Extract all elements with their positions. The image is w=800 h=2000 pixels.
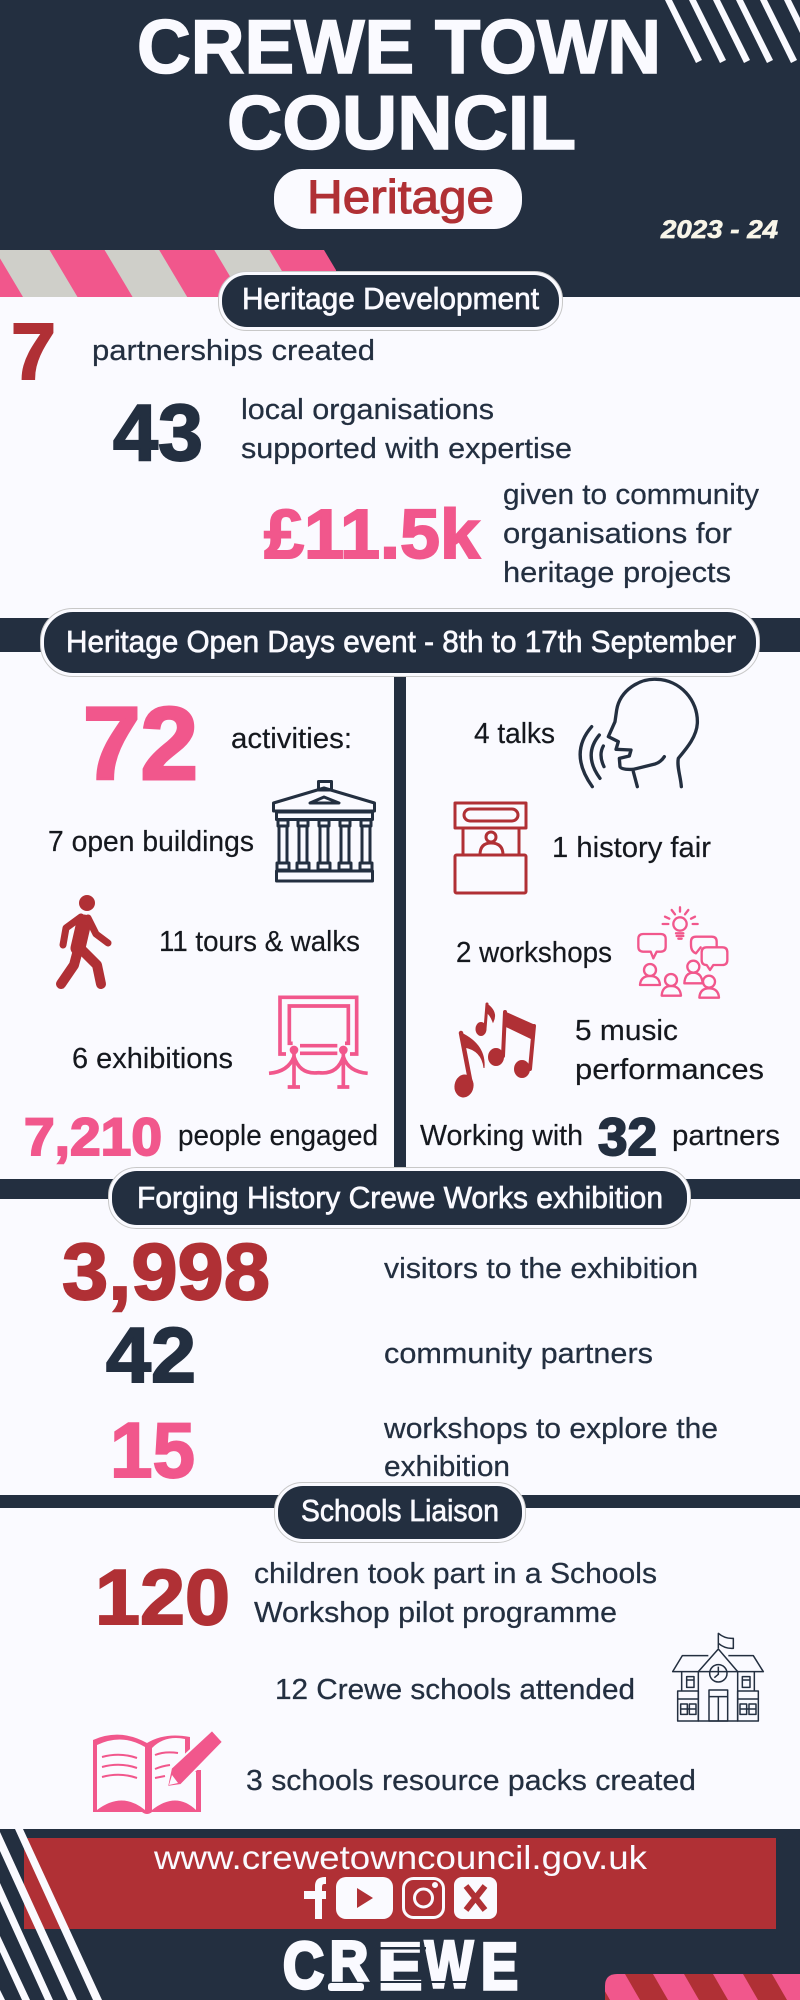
stat: 7 partnerships: 7	[11, 307, 56, 396]
website banner: www.crewetowncouncil.gov.uk	[153, 1839, 648, 1876]
stat: 72 activities: 72	[83, 686, 198, 801]
text: 5 music performances	[575, 1015, 764, 1086]
icon: music notes	[453, 1004, 534, 1098]
title	[137, 5, 661, 166]
icon: youtube	[336, 1877, 393, 1919]
icon: speaking head	[580, 679, 697, 787]
heading pill	[40, 608, 760, 676]
stat: 72 activities: activities:	[231, 723, 352, 755]
stat: 42 community partners: community partners	[384, 1338, 653, 1370]
panel: footer	[0, 1829, 800, 2000]
text: 5 music performances: 5 music	[575, 1015, 678, 1047]
subtitle pill: Heritage	[274, 169, 522, 229]
text: 1 history fair: 1 history fair	[552, 832, 712, 864]
stat: 15 workshops: 15	[110, 1406, 195, 1494]
subtitle pill: Heritage: Heritage	[307, 170, 494, 223]
decorative white stripes	[0, 1829, 102, 2000]
logo: Crewe: C	[283, 1928, 324, 2000]
icon: book and pencil	[93, 1730, 223, 1814]
panel: schools liaison	[0, 1482, 800, 1814]
stat: 15 workshops	[110, 1406, 718, 1494]
stat: 120 children: 120	[95, 1553, 230, 1641]
heading pill	[274, 1482, 526, 1542]
stat: 43 organisations: supported with expertise	[241, 433, 572, 465]
stat: 11.5k funding: organisations for	[503, 518, 733, 550]
stat: 15 workshops: workshops to explore the	[383, 1413, 718, 1445]
stat: 43 organisations: 43	[113, 388, 203, 477]
text: 5 music performances: performances	[575, 1054, 764, 1086]
heading pill: Forging History Crewe Works exhibition	[137, 1180, 663, 1215]
stat: working with 32 partners: 32	[598, 1108, 657, 1167]
icon: temple building	[274, 782, 374, 881]
decorative white stripes	[665, 0, 800, 63]
logo: Crewe	[283, 1927, 518, 2000]
title: CREWE TOWN	[137, 5, 661, 90]
stat: 120 children: children took part in a Schools	[254, 1558, 657, 1590]
stat: 3,998 visitors	[62, 1227, 698, 1316]
panel: heritage open days	[0, 608, 800, 1168]
stat: working with 32 partners: partners	[672, 1120, 780, 1152]
logo: Crewe: W	[425, 1927, 474, 2000]
text: 4 talks: 4 talks	[474, 718, 555, 750]
stat: 42 community partners	[106, 1311, 653, 1399]
striped band	[0, 250, 352, 297]
icon: market stall	[455, 803, 526, 893]
stat: 3,998 visitors: 3,998	[62, 1227, 270, 1316]
stat: 7,210 people engaged	[24, 1108, 378, 1167]
heading pill	[218, 272, 562, 330]
icon: school building	[673, 1633, 763, 1721]
striped pink corner block	[605, 1974, 800, 2000]
text: 3 schools resource packs created: 3 schools resource packs created	[246, 1765, 696, 1797]
text: 12 Crewe schools attended: 12 Crewe schools attended	[275, 1674, 635, 1706]
stat: 120 children: Workshop pilot programme	[254, 1597, 617, 1629]
icon: X	[454, 1877, 497, 1919]
icon: facebook	[304, 1877, 326, 1919]
stat: 7,210 people engaged: 7,210	[24, 1108, 162, 1167]
website banner	[24, 1838, 776, 1929]
stat: 43 organisations: local organisations	[241, 394, 494, 426]
stat: 120 children	[95, 1553, 657, 1641]
social icons	[304, 1877, 497, 1919]
text: 11 tours and walks: 11 tours & walks	[159, 926, 360, 958]
panel: forging history exhibition	[0, 1168, 800, 1494]
stat: 11.5k funding	[264, 479, 760, 589]
stat: 11.5k funding: heritage projects	[503, 557, 731, 589]
heading pill: Schools Liaison	[301, 1493, 499, 1528]
icon: instagram	[404, 1878, 444, 1918]
stat: working with 32 partners: Working with	[420, 1120, 583, 1152]
text: 7 open buildings: 7 open buildings	[48, 826, 254, 858]
logo: Crewe: R	[330, 1929, 368, 1992]
icon: workshop people and ideas	[638, 907, 727, 998]
stat: 7 partnerships: partnerships created	[92, 335, 375, 367]
heading pill: Heritage Development	[242, 281, 539, 316]
icon: exhibition frame and ropes	[269, 997, 368, 1087]
stat: 3,998 visitors: visitors to the exhibition	[384, 1253, 698, 1285]
icon: walking person	[61, 895, 108, 984]
panel: heritage development	[11, 272, 760, 589]
stat: 42 community partners: 42	[106, 1311, 196, 1399]
stat: 72 activities	[83, 686, 352, 801]
stat: 15 workshops: exhibition	[384, 1451, 510, 1483]
stat: working with 32 partners	[420, 1108, 780, 1167]
heading pill	[108, 1168, 690, 1228]
stat: 11.5k funding: £11.5k	[264, 495, 480, 573]
title: COUNCIL	[227, 81, 576, 166]
date: 2023 - 24	[660, 216, 778, 244]
stat: 43 organisations	[113, 388, 572, 477]
heading pill: Heritage Open Days event - 8th to 17th September	[66, 624, 736, 659]
text: 2 workshops: 2 workshops	[456, 937, 612, 969]
text: 6 exhibitions: 6 exhibitions	[72, 1043, 233, 1075]
stat: 7,210 people engaged: people engaged	[178, 1120, 378, 1152]
stat: 7 partnerships	[11, 307, 375, 396]
stat: 11.5k funding: given to community	[503, 479, 760, 511]
vertical divider	[394, 677, 406, 1168]
panel: header	[0, 0, 800, 297]
